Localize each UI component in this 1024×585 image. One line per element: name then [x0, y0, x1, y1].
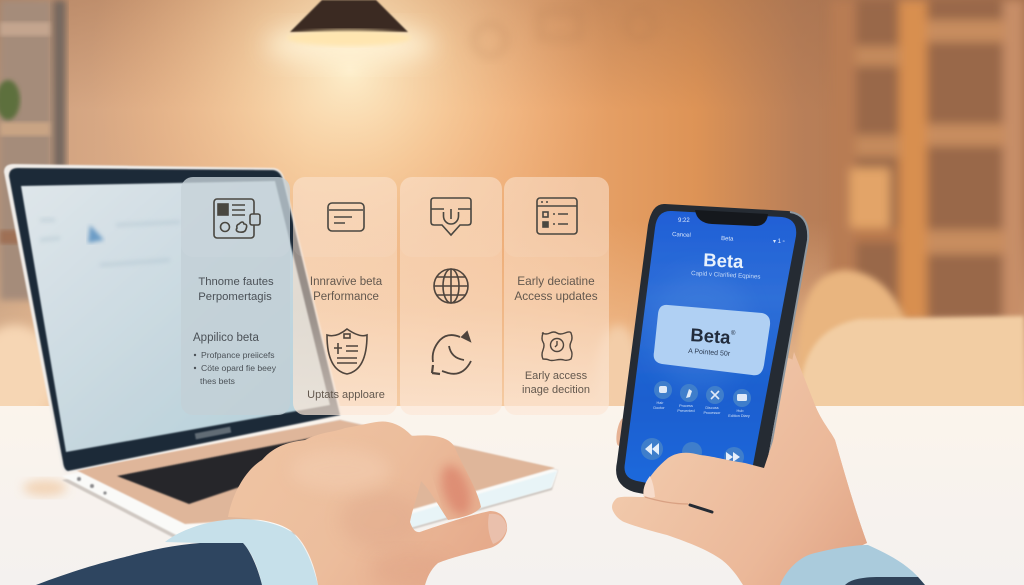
phone feature labels: Processor: [703, 411, 721, 415]
card 1 text block: Profpance preiicefs: [201, 350, 275, 360]
phone notch: [695, 210, 768, 226]
phone feature labels: Edition Diary: [728, 414, 750, 418]
status text: Beta: [721, 236, 734, 243]
card 1 heading: [198, 276, 274, 303]
icon: refresh clock: [432, 332, 471, 374]
phone subtitle: Capid v Clarified Eqpines: [691, 270, 761, 281]
panel: frosted card 3: [400, 177, 502, 415]
left hand: [228, 422, 507, 585]
card 1 heading: Perpomertagis: [198, 291, 272, 303]
phone feature labels: Process: [679, 404, 693, 408]
fingertip behind phone: [615, 418, 627, 446]
card 1 text block: Cöte opard fie beey: [201, 363, 277, 373]
phone media controls: [641, 438, 744, 467]
left shirt cuff: [165, 519, 318, 585]
card 1 text block: Appilico beta: [193, 332, 259, 344]
card 1 text block: thes bets: [200, 376, 235, 386]
right shirt cuff: [780, 545, 925, 585]
icon: profile card: [214, 199, 260, 238]
card 4 caption: Early access: [525, 370, 588, 382]
card 4 heading: Early deciatine: [517, 274, 595, 288]
table surface: [0, 406, 1024, 585]
laptop: [4, 164, 558, 540]
phone feature icons: [654, 381, 751, 407]
card 4 caption: inage decition: [522, 384, 590, 396]
card 2 heading: [310, 276, 383, 303]
card 2 caption: Uptats apploare: [307, 389, 385, 401]
icon: power tag: [431, 198, 471, 235]
panel: frosted card 4: [504, 177, 609, 415]
phone screen: [624, 211, 796, 499]
laptop base: [23, 420, 558, 540]
panel: frosted card 2: [293, 177, 397, 415]
card title: Beta: [690, 324, 732, 348]
phone card: ®: [731, 330, 736, 337]
lamp: [265, 0, 435, 65]
status text: Cancel: [672, 232, 691, 239]
phone feature labels: [653, 401, 750, 418]
laptop ports: [77, 477, 107, 495]
icon: stamp clock: [542, 332, 572, 360]
phone bottom sliver: [690, 505, 712, 512]
phone feature labels: Doctor: [653, 406, 665, 410]
right suit sleeve: [845, 577, 925, 585]
laptop screen: [4, 164, 342, 473]
right palm behind phone: [745, 358, 867, 585]
status text: [672, 218, 785, 245]
icon: browser note: [328, 203, 364, 231]
icon: globe: [434, 269, 468, 303]
phone: [616, 204, 808, 512]
phone feature labels: Discuss: [705, 406, 719, 410]
panel: frosted card 1: [181, 177, 290, 415]
bookshelf: [830, 0, 1024, 320]
card 4 heading: [514, 274, 598, 303]
phone card: [654, 305, 770, 375]
card 4 caption: [522, 370, 590, 396]
phone feature labels: Prevented: [677, 409, 695, 413]
keyboard: [117, 433, 350, 504]
phone feature labels: Hub: [737, 409, 743, 413]
right hand and sleeve: [612, 352, 925, 585]
phone feature labels: Hair: [657, 401, 664, 405]
card 2 heading: Innravive beta: [310, 276, 383, 288]
icon: checklist window: [537, 198, 577, 234]
blurred armchairs: [798, 270, 1024, 410]
card subtitle: A Pointed 50r: [688, 348, 731, 358]
card 1 text block: [193, 332, 277, 386]
thumb nail: [644, 476, 655, 498]
icon: shield document: [327, 329, 367, 374]
right hand front: [612, 352, 867, 585]
left hand and sleeve: [36, 422, 507, 585]
card 1 heading: Thnome fautes: [198, 276, 274, 288]
status text: ▾ 1 ▫: [773, 239, 785, 245]
status text: 9:22: [678, 218, 690, 224]
card 2 heading: Performance: [313, 291, 379, 303]
phone title: Beta: [703, 249, 745, 272]
left suit sleeve: [36, 543, 262, 585]
phone body: [616, 204, 808, 512]
finger crease: [645, 497, 688, 504]
thumbnail: [488, 514, 507, 544]
card 4 heading: Access updates: [514, 289, 598, 303]
